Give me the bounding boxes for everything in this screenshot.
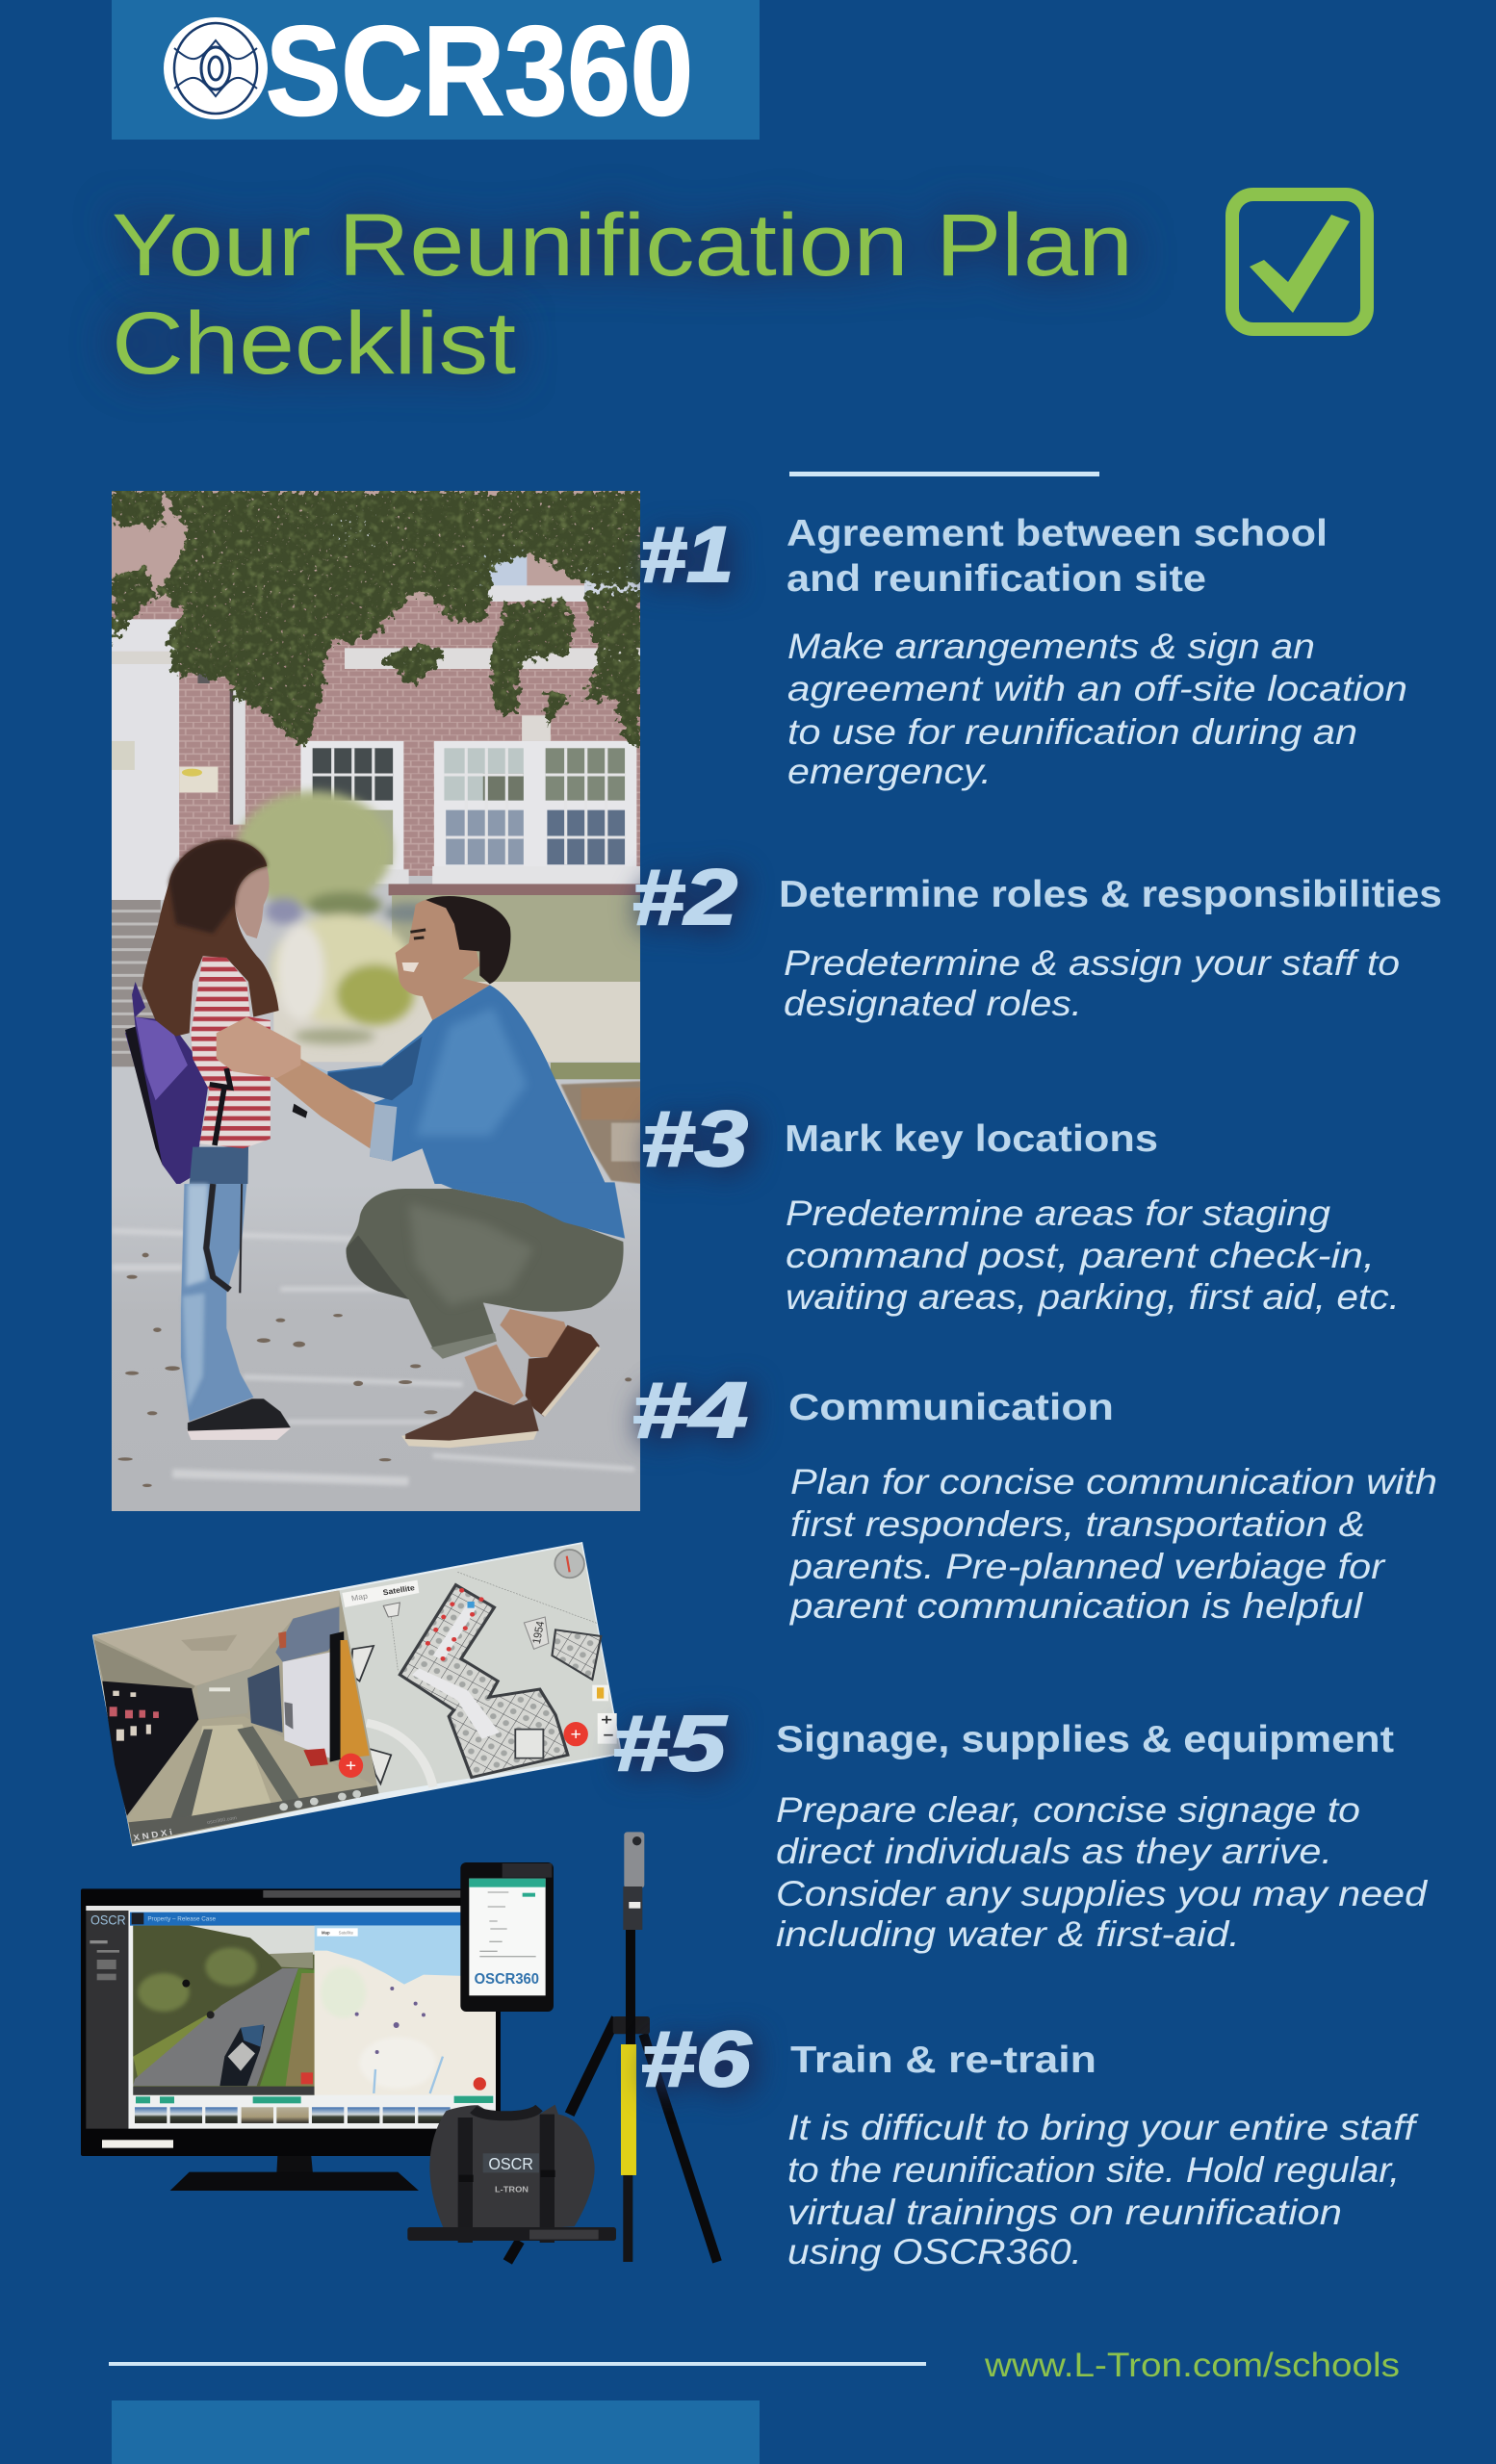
man shirt xyxy=(327,985,605,1184)
road map: Satellite xyxy=(339,1930,354,1935)
logo wordmark: SCR360 xyxy=(266,0,693,141)
body 3: Predetermine areas for staging xyxy=(786,1194,1330,1233)
number 6: #6 xyxy=(640,2015,753,2103)
map tabs xyxy=(317,1928,358,1937)
man hair xyxy=(426,896,511,984)
man pants xyxy=(347,1189,624,1359)
title xyxy=(112,196,1133,393)
body 3: waiting areas, parking, first aid, etc. xyxy=(786,1277,1400,1317)
backpack xyxy=(125,982,208,1186)
body 2 xyxy=(784,943,1400,1023)
body 1: agreement with an off-site location xyxy=(787,669,1407,708)
body 6: to the reunification site. Hold regular, xyxy=(787,2150,1400,2190)
heading 1: Agreement between school xyxy=(787,513,1328,554)
man back shoe xyxy=(526,1325,600,1417)
body 4: first responders, transportation & xyxy=(790,1504,1365,1544)
body 5 xyxy=(776,1790,1429,1954)
tree canopy xyxy=(112,491,641,751)
body 3: command post, parent check-in, xyxy=(786,1236,1375,1275)
taskbar search xyxy=(102,2140,173,2148)
number 2: #2 xyxy=(632,854,737,941)
body 1 xyxy=(787,627,1407,791)
logo banner xyxy=(112,0,760,141)
body 4: parent communication is helpful xyxy=(789,1586,1364,1626)
road photo xyxy=(133,1926,315,2095)
body 6 xyxy=(787,2108,1419,2272)
heading 4: Communication xyxy=(788,1387,1114,1428)
body 5: Prepare clear, concise signage to xyxy=(776,1790,1360,1830)
camera bag xyxy=(407,2105,616,2243)
step 5 xyxy=(612,1700,1429,1954)
compass xyxy=(555,1550,584,1578)
monitor xyxy=(81,1888,501,2191)
middle photo: people and background xyxy=(112,791,641,1216)
body 2: designated roles. xyxy=(784,984,1082,1023)
map panel: 1954 xyxy=(530,1620,547,1645)
footer banner xyxy=(112,2400,760,2464)
hallway add button xyxy=(339,1754,363,1778)
body 5: direct individuals as they arrive. xyxy=(776,1832,1332,1871)
number 5: #5 xyxy=(612,1700,728,1787)
body 2: Predetermine & assign your staff to xyxy=(784,943,1400,983)
icon: green checkbox xyxy=(1232,194,1367,329)
thumbnail strip xyxy=(135,2107,451,2123)
bag patch xyxy=(483,2153,539,2172)
body 1: emergency. xyxy=(787,752,992,791)
step 2 xyxy=(632,854,1442,1023)
man cuffs xyxy=(370,1104,397,1162)
hallway panel xyxy=(93,1590,379,1845)
step 4 xyxy=(632,1367,1437,1626)
background shrubs, lawn and stairs xyxy=(112,791,641,1216)
pavement xyxy=(112,1184,641,1513)
number 1: #1 xyxy=(639,511,734,599)
map tabs xyxy=(342,1580,419,1607)
hallway panel: X N D X i xyxy=(132,1827,173,1843)
white frame xyxy=(92,1542,622,1846)
photo: father greeting daughter outside school xyxy=(112,491,641,1513)
viewer toolbar xyxy=(129,1785,379,1843)
monitor header text: Property – Release Case xyxy=(147,1915,217,1922)
backpack straps xyxy=(210,1068,230,1145)
upper photo: school and tree xyxy=(112,491,641,876)
360 camera xyxy=(623,1832,644,1930)
camera bag: OSCR xyxy=(488,2154,533,2173)
step 3 xyxy=(641,1095,1400,1317)
girl hair xyxy=(142,839,279,1037)
website link: www.L-Tron.com/schools xyxy=(984,2347,1400,2384)
body 1: Make arrangements & sign an xyxy=(787,627,1315,666)
school building xyxy=(112,491,641,876)
body 6: It is difficult to bring your entire staff xyxy=(787,2108,1419,2147)
heading 6: Train & re-train xyxy=(790,2040,1096,2081)
map add button xyxy=(563,1722,588,1746)
heading 3: Mark key locations xyxy=(785,1118,1158,1160)
map controls xyxy=(592,1685,608,1701)
bottom rule xyxy=(109,2362,926,2366)
map panel xyxy=(339,1544,620,1793)
body 5: Consider any supplies you may need xyxy=(776,1874,1429,1913)
hallway panel: oscr360.com xyxy=(207,1815,237,1826)
body 4 xyxy=(789,1462,1437,1626)
map panel: Map xyxy=(350,1591,369,1603)
girl face xyxy=(235,867,270,938)
road map xyxy=(315,1926,496,2095)
equipment: monitor, tablet, bag and camera tripod xyxy=(81,1832,717,2262)
step 1 xyxy=(639,511,1407,791)
man face xyxy=(396,899,490,1020)
body 5: including water & first-aid. xyxy=(776,1914,1240,1954)
building label xyxy=(524,1617,549,1649)
girl shoe xyxy=(187,1399,292,1440)
heading 2: Determine roles & responsibilities xyxy=(779,874,1442,915)
girl jeans xyxy=(181,1184,253,1422)
tripod xyxy=(507,1832,717,2262)
lower photo: legs, shoes and pavement xyxy=(112,1182,641,1513)
body 4: Plan for concise communication with xyxy=(790,1462,1437,1502)
man front shoe xyxy=(401,1391,539,1448)
tablet logo: OSCR360 xyxy=(475,1971,539,1988)
top rule xyxy=(789,472,1099,476)
monitor sidebar logo: OSCR xyxy=(90,1912,126,1927)
step 6 xyxy=(640,2015,1419,2272)
heading 1 xyxy=(787,513,1328,600)
heading 1: and reunification site xyxy=(787,558,1206,600)
body 3 xyxy=(786,1194,1400,1317)
heading 5: Signage, supplies & equipment xyxy=(776,1719,1394,1760)
man forearm and hands xyxy=(273,1059,375,1148)
yellow handle xyxy=(621,2044,636,2175)
body 1: to use for reunification during an xyxy=(787,712,1357,752)
bag L-Tron label: L-TRON xyxy=(495,2184,529,2194)
tablet xyxy=(460,1862,554,2012)
monitor toolbar xyxy=(136,2096,493,2103)
floor plan xyxy=(400,1585,568,1778)
icon: OSCR camera lens xyxy=(164,17,268,119)
body 6: virtual trainings on reunification xyxy=(787,2193,1342,2232)
screenshot: 360 hallway view and floor plan map xyxy=(92,1542,622,1846)
number 3: #3 xyxy=(641,1095,748,1183)
man legs xyxy=(464,1309,567,1405)
girl jeans top xyxy=(189,1147,248,1184)
body 4: parents. Pre-planned verbiage for xyxy=(789,1547,1386,1586)
rods xyxy=(407,2227,616,2241)
striped shirt xyxy=(191,956,271,1148)
title: Checklist xyxy=(112,295,516,393)
map panel: Satellite xyxy=(382,1582,416,1597)
title: Your Reunification Plan xyxy=(112,196,1133,295)
body 6: using OSCR360. xyxy=(787,2232,1082,2272)
road map: Map xyxy=(322,1930,330,1935)
man shirt hem xyxy=(437,1182,625,1239)
number 4: #4 xyxy=(632,1367,748,1454)
